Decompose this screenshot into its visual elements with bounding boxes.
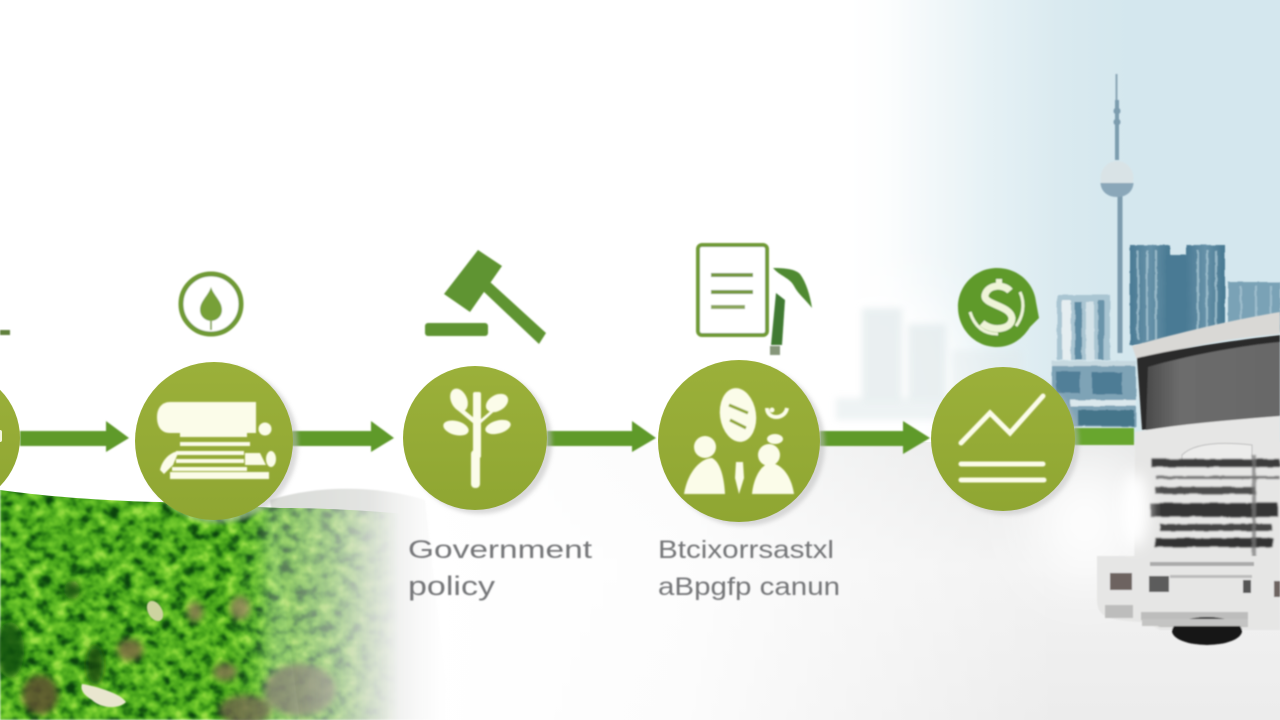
CN tower xyxy=(1100,74,1134,353)
soil patches xyxy=(0,581,336,720)
label: government policy: Government xyxy=(408,536,592,564)
truck body xyxy=(1134,416,1280,630)
arrow 2 xyxy=(292,421,394,452)
truck windshield frame xyxy=(1137,335,1280,430)
sky fade near horizon xyxy=(790,290,970,530)
small emblem xyxy=(767,408,787,417)
label: second step caption: Btcixorrsastxl xyxy=(658,536,834,564)
arrow 3 xyxy=(547,421,656,452)
bumper xyxy=(1097,556,1280,630)
document xyxy=(698,245,767,335)
pale leaves xyxy=(81,598,167,707)
skyline xyxy=(1052,245,1280,427)
truck wheel xyxy=(1172,617,1242,645)
disc shadow xyxy=(935,371,1079,515)
truck xyxy=(1097,312,1280,645)
step 2 xyxy=(403,366,552,514)
disc shadow xyxy=(663,364,825,526)
leaf with dollar xyxy=(716,386,760,444)
printer icon xyxy=(157,402,276,479)
pale right wash xyxy=(258,508,376,720)
step 1 xyxy=(135,362,298,523)
step 3 xyxy=(658,360,825,526)
podium blocks xyxy=(1052,361,1136,427)
foliage xyxy=(0,490,392,720)
stakeholders icon xyxy=(684,386,794,494)
arrow 1 xyxy=(20,421,129,452)
label: government policy: policy xyxy=(408,571,496,601)
windshield glass xyxy=(1146,342,1280,430)
truck roof xyxy=(1132,312,1280,360)
disc 0 icon mark xyxy=(0,430,2,442)
faded skyline xyxy=(836,308,1026,420)
disc shadow xyxy=(408,370,552,514)
bumper band xyxy=(1105,605,1248,627)
disc 2 xyxy=(403,366,547,510)
ground xyxy=(420,442,1280,720)
disc 3 xyxy=(658,360,820,522)
pickaxe xyxy=(770,268,812,355)
process arrows xyxy=(20,421,1134,454)
growth chart icon xyxy=(961,396,1044,480)
centre tie xyxy=(735,462,744,494)
disc 1 xyxy=(135,362,293,520)
hood arc xyxy=(1182,443,1252,460)
arrow 4 xyxy=(820,421,930,454)
icon: gavel xyxy=(425,250,546,344)
truck headlight glow xyxy=(1121,472,1149,548)
icon: water drop xyxy=(181,274,241,334)
icon: document and pickaxe xyxy=(698,245,812,355)
towers xyxy=(1130,245,1280,345)
label: second step caption: aBpgfp canun xyxy=(658,573,840,601)
step 0: partial circle xyxy=(0,330,20,506)
right person xyxy=(758,444,780,466)
disc shadow xyxy=(140,365,298,523)
left person xyxy=(694,436,716,458)
truck connector xyxy=(1074,428,1134,445)
sapling icon xyxy=(442,386,512,488)
disc 4 xyxy=(931,367,1075,511)
hill mist xyxy=(270,489,450,720)
leaf texture xyxy=(0,490,392,720)
label: second step caption xyxy=(658,536,840,601)
bumper front over wheel xyxy=(1142,619,1248,626)
small tower xyxy=(1057,295,1110,360)
disc 0 xyxy=(0,370,20,506)
step 4 xyxy=(931,367,1079,515)
icon: dollar cycle badge xyxy=(958,268,1039,347)
dash above xyxy=(0,330,10,335)
grille xyxy=(1150,455,1280,625)
label: government policy xyxy=(408,536,592,601)
bumper lights xyxy=(1110,562,1280,597)
sky xyxy=(850,0,1280,445)
